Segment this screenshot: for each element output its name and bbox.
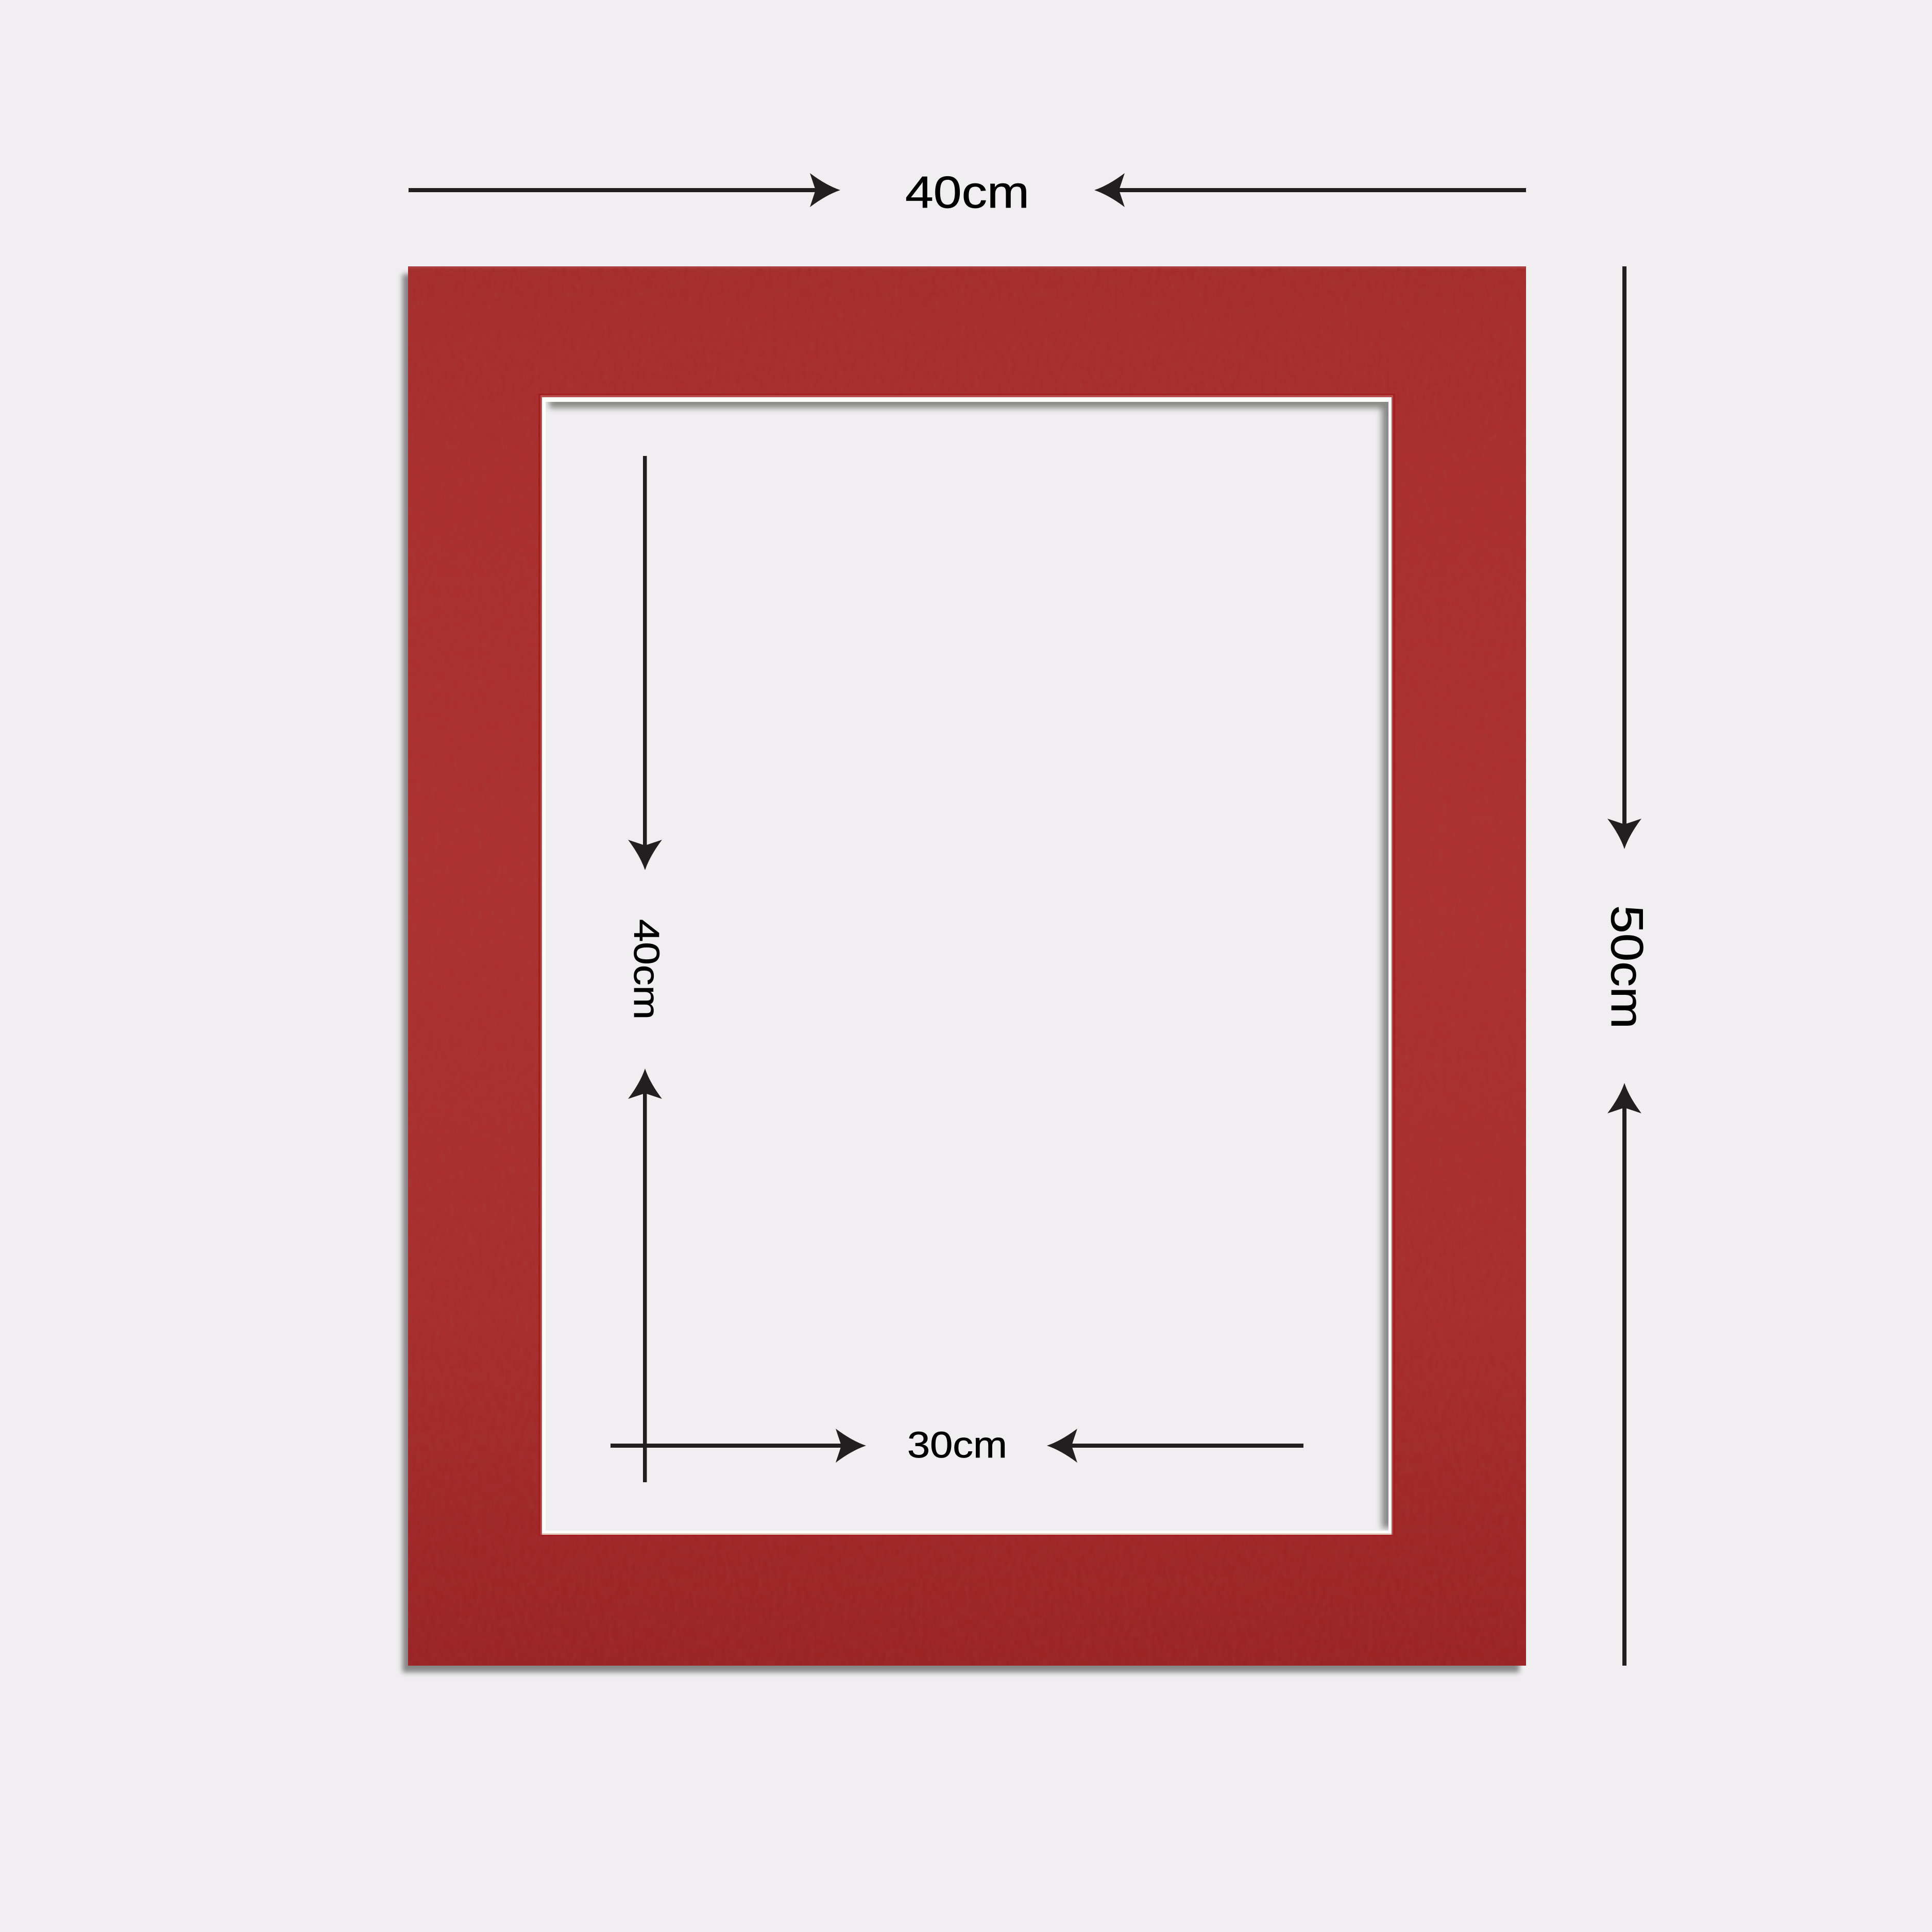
opening: bottom bevel tint: [542, 1533, 1392, 1535]
top arrow: [1607, 266, 1641, 849]
mat board paper texture: [408, 266, 1526, 1666]
left arrow: [611, 1429, 866, 1463]
bottom arrow: [1607, 1083, 1641, 1666]
opening: inner shadow: [549, 397, 1394, 1528]
opening: white core bevel: [542, 397, 1392, 1533]
right arrow: [1094, 173, 1526, 207]
top arrow: [628, 456, 662, 870]
width label: 40cm: [905, 167, 1029, 217]
dimension: outer width 40cm: [409, 167, 1526, 217]
top edge highlight: [408, 266, 1526, 268]
mat board surface: [408, 266, 1526, 1666]
opening: dark cut edge: [538, 394, 1395, 1536]
right arrow: [1047, 1429, 1303, 1463]
opening: pink bevel: [540, 395, 1393, 1535]
bottom arrow: [628, 1069, 662, 1482]
dimension: outer height 50cm: [1602, 266, 1653, 1666]
dimension: opening width 30cm: [611, 1425, 1303, 1466]
left arrow: [409, 173, 840, 207]
frame drop shadow: [402, 274, 1519, 1672]
panel: red mat board frame: [402, 266, 1526, 1672]
dimension: opening height 40cm: [626, 456, 667, 1482]
opening width label: 30cm: [907, 1425, 1007, 1466]
opening: backing area: [546, 402, 1388, 1531]
infographic: mat board dimensions: [399, 173, 1643, 1676]
height label: 50cm: [1602, 905, 1653, 1029]
opening height label: 40cm: [626, 919, 667, 1020]
